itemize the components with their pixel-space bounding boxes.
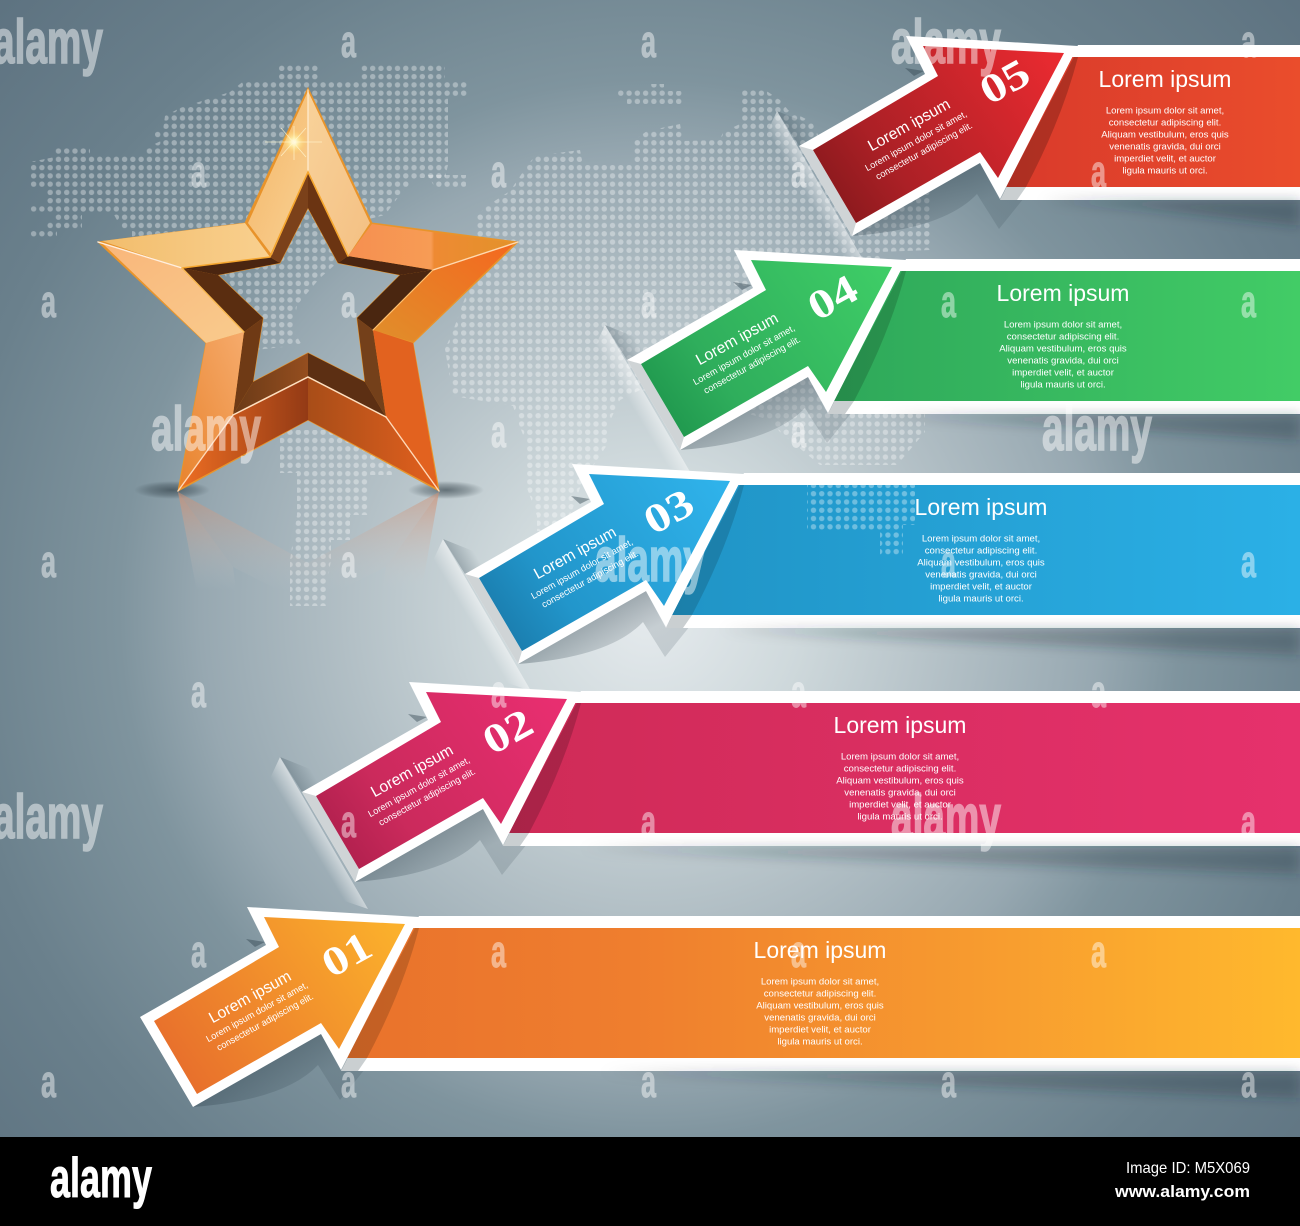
watermark letters: a [1091, 666, 1107, 717]
watermark letters: a [491, 926, 507, 977]
watermark letters: a [1241, 796, 1257, 847]
banner body: consectetur adipiscing elit. [1109, 118, 1221, 128]
watermark letters: a [791, 666, 807, 717]
banner body: Aliquam vestibulum, eros quis [999, 344, 1127, 354]
watermark letters: a [791, 926, 807, 977]
watermark letters: a [1091, 926, 1107, 977]
watermark letters: a [41, 1056, 57, 1107]
banner body: ligula mauris ut orci. [777, 1036, 863, 1048]
star ground shadow [134, 481, 484, 499]
banner body: Aliquam vestibulum, eros quis [836, 776, 964, 786]
banner body [1101, 106, 1229, 176]
banner body: imperdiet velit, et auctor [849, 800, 952, 810]
banner body: Lorem ipsum dolor sit amet, [922, 534, 1040, 544]
arrow [302, 682, 581, 882]
banner body: venenatis gravida, dui orci [1109, 142, 1221, 152]
arrow shadow [518, 496, 690, 664]
number: 05 [971, 49, 1038, 113]
watermark wordmarks: alamy [1042, 395, 1152, 464]
panel 1: orange [140, 907, 1300, 1107]
banner title: Lorem ipsum [1099, 66, 1231, 92]
watermark letters: a [341, 16, 357, 67]
watermark letters: a [1241, 276, 1257, 327]
watermark letters: a [641, 1056, 657, 1107]
watermark letters: a [191, 146, 207, 197]
arrow text: Lorem ipsum [368, 742, 456, 801]
star ridge highlights [98, 90, 518, 491]
panel 3: blue [430, 464, 1300, 691]
watermark letters: a [791, 146, 807, 197]
watermark letters: a [341, 276, 357, 327]
watermark letters: a [491, 666, 507, 717]
banner body: imperdiet velit, et auctor [769, 1024, 872, 1036]
banner [341, 916, 1300, 1071]
watermark letters: a [191, 926, 207, 977]
banner [828, 259, 1300, 414]
banner title: Lorem ipsum [834, 712, 966, 738]
arrow shadow [193, 939, 365, 1107]
banner body [756, 976, 884, 1048]
banner body: venenatis gravida, dui orci [925, 570, 1037, 580]
arrow shadow [852, 68, 1024, 236]
banner [666, 473, 1300, 628]
website: www.alamy.com [1114, 1182, 1250, 1201]
star reflection [178, 492, 439, 650]
banner body: imperdiet velit, et auctor [1114, 154, 1217, 164]
arrow text: consectetur adipiscing elit. [215, 991, 315, 1053]
watermark letters: a [341, 1056, 357, 1107]
arrow [465, 464, 744, 664]
banner drop shadows [580, 200, 1300, 1098]
watermark letters: a [941, 276, 957, 327]
map: north america east fragment [428, 175, 466, 188]
banner body: ligula mauris ut orci. [938, 594, 1024, 604]
watermark letters: a [41, 276, 57, 327]
banner title: Lorem ipsum [915, 494, 1047, 520]
watermark letters: a [1241, 1056, 1257, 1107]
arrow text: consectetur adipiscing elit. [540, 548, 640, 610]
watermark letters: a [641, 276, 657, 327]
panel 2: magenta [267, 682, 1300, 909]
watermark letters: a [191, 666, 207, 717]
map: eurasia and africa [445, 90, 930, 531]
panel 5: red [764, 36, 1300, 263]
arrow shadow [355, 714, 527, 882]
banner body: venenatis gravida, dui orci [764, 1012, 876, 1024]
arrow text: Lorem ipsum dolor sit amet, [691, 323, 797, 387]
star inner walls [182, 172, 433, 417]
banner title: Lorem ipsum [754, 937, 886, 963]
number: 01 [313, 922, 380, 986]
banner body: Lorem ipsum dolor sit amet, [1106, 106, 1224, 116]
watermark letters: a [941, 536, 957, 587]
fold [764, 111, 865, 263]
arrow text: consectetur adipiscing elit. [874, 120, 974, 182]
banner body: Lorem ipsum dolor sit amet, [761, 976, 879, 988]
banner body: venenatis gravida, dui orci [1007, 356, 1119, 366]
fold [430, 539, 531, 691]
watermark letters: a [641, 16, 657, 67]
number: 04 [799, 265, 866, 329]
banner body: Aliquam vestibulum, eros quis [756, 1000, 884, 1012]
watermark letters: a [941, 1056, 957, 1107]
banner body [999, 320, 1127, 390]
arrow text: Lorem ipsum dolor sit amet, [529, 537, 635, 601]
banner body: consectetur adipiscing elit. [1007, 332, 1119, 342]
fold [267, 757, 368, 909]
banner [503, 691, 1300, 846]
banner body: consectetur adipiscing elit. [925, 546, 1037, 556]
watermark wordmarks: alamy [595, 526, 705, 595]
banner body: Aliquam vestibulum, eros quis [1101, 130, 1229, 140]
panel 4: green [592, 250, 1300, 477]
banner body [917, 534, 1045, 604]
watermark wordmarks: alamy [151, 395, 261, 464]
arrow text: consectetur adipiscing elit. [377, 766, 477, 828]
arrow [140, 907, 419, 1107]
map: south america [280, 430, 392, 606]
footer logo: alamy [50, 1146, 152, 1209]
watermark letters: a [1091, 146, 1107, 197]
image id: Image ID: M5X069 [1126, 1160, 1250, 1177]
watermark letters: a [341, 536, 357, 587]
arrow text: Lorem ipsum [693, 310, 781, 369]
banner body: imperdiet velit, et auctor [930, 582, 1033, 592]
watermark letters: a [1241, 16, 1257, 67]
map: north america [30, 64, 468, 350]
banner [1000, 45, 1300, 200]
map: arctic islands [616, 84, 682, 104]
arrow text: Lorem ipsum dolor sit amet, [863, 109, 969, 173]
watermark letters: a [491, 406, 507, 457]
arrow shadow [680, 282, 852, 450]
watermark wordmarks [0, 8, 1152, 852]
arrow text: Lorem ipsum [865, 96, 953, 155]
banner body: ligula mauris ut orci. [1020, 380, 1106, 390]
banner body [836, 752, 964, 822]
watermark letters: a [641, 796, 657, 847]
arrow [799, 36, 1078, 236]
watermark wordmarks: alamy [891, 8, 1001, 77]
watermark wordmarks: alamy [891, 783, 1001, 852]
arrow text: Lorem ipsum [531, 524, 619, 583]
banner body: ligula mauris ut orci. [857, 812, 943, 822]
arrow [627, 250, 906, 450]
icon: gold star [98, 88, 518, 491]
arrow text: Lorem ipsum dolor sit amet, [366, 755, 472, 819]
banner body: Lorem ipsum dolor sit amet, [841, 752, 959, 762]
banner body: consectetur adipiscing elit. [764, 988, 876, 1000]
watermark letters: a [491, 146, 507, 197]
arrow text: consectetur adipiscing elit. [702, 334, 802, 396]
dotted world map [30, 64, 930, 606]
banner title: Lorem ipsum [997, 280, 1129, 306]
watermark letters: a [791, 406, 807, 457]
banner body: venenatis gravida, dui orci [844, 788, 956, 798]
number: 02 [474, 699, 541, 763]
banner body: Lorem ipsum dolor sit amet, [1004, 320, 1122, 330]
watermark letters: a [1241, 536, 1257, 587]
banner body: ligula mauris ut orci. [1122, 166, 1208, 176]
map dots on banner [807, 485, 915, 557]
number: 03 [635, 479, 702, 543]
star sparkle [265, 126, 322, 160]
fold [592, 325, 693, 477]
arrow text: Lorem ipsum [206, 968, 294, 1027]
footer bar [0, 1137, 1300, 1226]
arrow text: Lorem ipsum dolor sit amet, [204, 980, 310, 1044]
star faces [102, 91, 514, 489]
watermark letters: a [41, 536, 57, 587]
watermark letters: a [341, 796, 357, 847]
banner body: consectetur adipiscing elit. [844, 764, 956, 774]
banner body: Aliquam vestibulum, eros quis [917, 558, 1045, 568]
banner body: imperdiet velit, et auctor [1012, 368, 1115, 378]
